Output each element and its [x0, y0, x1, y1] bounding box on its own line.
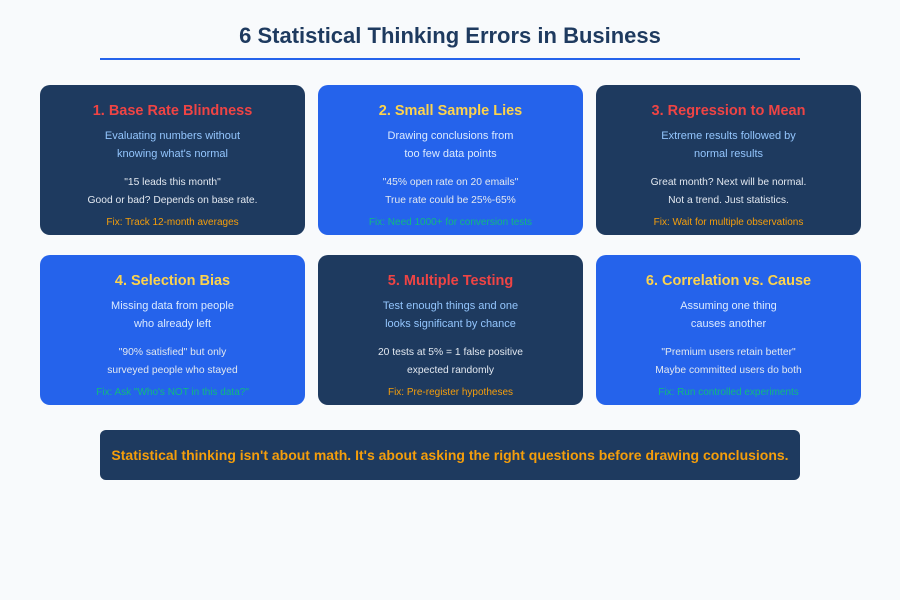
panel: multiple testing: 20 tests at 5% = 1 false positive — [378, 347, 523, 358]
panel: regression to mean — [596, 85, 861, 235]
panel: selection bias — [40, 255, 305, 405]
panel: base rate blindness: Fix: Track 12-month averages — [106, 217, 239, 228]
panel: correlation vs cause: 6. Correlation vs. Cause — [646, 273, 811, 289]
panel: selection bias: surveyed people who stayed — [107, 365, 238, 376]
panel: regression to mean: Extreme results followed by — [661, 130, 796, 142]
panel: regression to mean: 3. Regression to Mean — [652, 103, 805, 119]
panel: multiple testing: Fix: Pre-register hypotheses — [388, 387, 513, 398]
panel: regression to mean: Great month? Next will be normal. — [651, 177, 806, 188]
panel: multiple testing: looks significant by chance — [385, 318, 516, 330]
panel: small sample lies: Drawing conclusions from — [388, 130, 513, 142]
panel: multiple testing — [318, 255, 583, 405]
panel: small sample lies: too few data points — [404, 148, 497, 160]
panel: correlation vs cause: Assuming one thing — [680, 300, 777, 312]
panel: selection bias: Missing data from people — [111, 300, 234, 312]
panel: correlation vs cause: Fix: Run controlled experiments — [658, 387, 799, 398]
panel: base rate blindness: Evaluating numbers without — [105, 130, 240, 142]
panel: selection bias: 4. Selection Bias — [115, 273, 230, 289]
panel: selection bias: who already left — [134, 318, 211, 330]
title: 6 Statistical Thinking Errors in Business — [239, 23, 661, 48]
panel: base rate blindness: Good or bad? Depends on base rate. — [87, 195, 258, 206]
panel: regression to mean: Not a trend. Just statistics. — [668, 195, 789, 206]
panel: correlation vs cause: causes another — [691, 318, 766, 330]
panel: base rate blindness: "15 leads this month" — [124, 177, 221, 188]
callout banner: Statistical thinking isn't about math. It's about asking the right questions before drawing conclusions. — [111, 447, 789, 463]
panel: small sample lies: True rate could be 25%-65% — [385, 195, 516, 206]
panel: small sample lies: "45% open rate on 20 emails" — [383, 177, 518, 188]
panel: multiple testing: Test enough things and one — [383, 300, 518, 312]
panel: regression to mean: normal results — [694, 148, 763, 160]
panel: selection bias: "90% satisfied" but only — [119, 347, 226, 358]
panel: selection bias: Fix: Ask "Who's NOT in this data?" — [96, 387, 249, 398]
panel: base rate blindness — [40, 85, 305, 235]
panel: base rate blindness: 1. Base Rate Blindness — [93, 103, 252, 119]
panel: small sample lies: Fix: Need 1000+ for conversion tests — [369, 217, 532, 228]
panel: regression to mean: Fix: Wait for multiple observations — [654, 217, 803, 228]
panel: small sample lies: 2. Small Sample Lies — [379, 103, 522, 119]
panel: multiple testing: expected randomly — [407, 365, 494, 376]
panel: base rate blindness: knowing what's normal — [117, 148, 228, 160]
panel: small sample lies — [318, 85, 583, 235]
panel: correlation vs cause — [596, 255, 861, 405]
panel: correlation vs cause: Maybe committed users do both — [655, 365, 802, 376]
callout banner — [100, 430, 800, 480]
panel: multiple testing: 5. Multiple Testing — [388, 273, 513, 289]
panel: correlation vs cause: "Premium users retain better" — [661, 347, 796, 358]
